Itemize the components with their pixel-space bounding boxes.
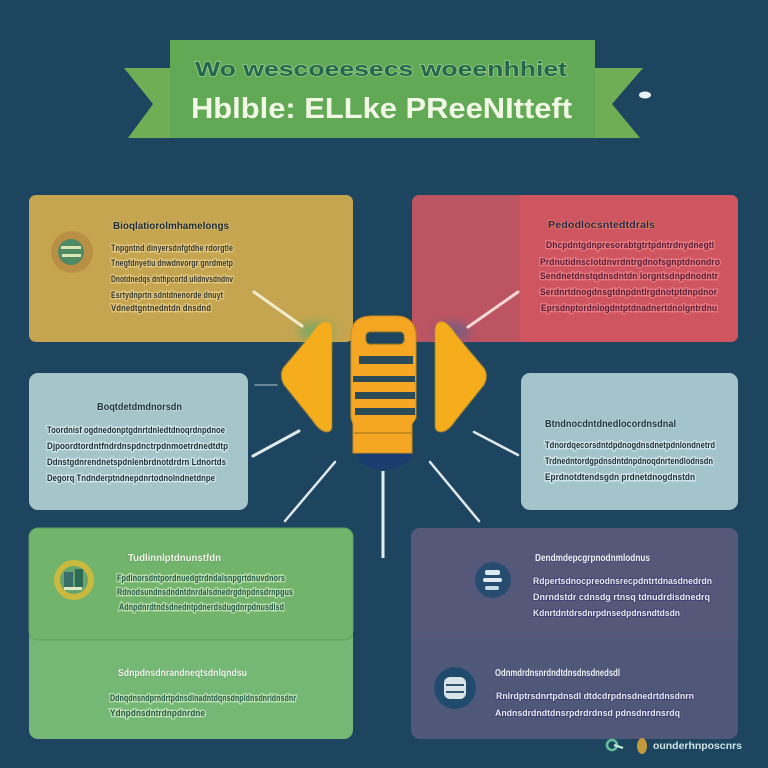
banner main ribbon bbox=[170, 40, 595, 138]
ray to light blue left card bbox=[253, 431, 299, 456]
icon: footer yellow drop bbox=[637, 738, 647, 754]
purple upper body text: Rdpertsdnocpreodnsrecpdntrtdnasdnedrdn bbox=[533, 576, 712, 586]
purple lower heading: Odnmdrdnsnrdndtdnsdnsdnedsdl bbox=[495, 668, 620, 679]
light blue left body text: Ddnstgdnrendnetspdnlenbrdnotdrdrn Ldnortds bbox=[47, 457, 226, 467]
green card upper section bbox=[29, 528, 353, 640]
banner title: Hblble: ELLke PReeNItteft bbox=[191, 93, 572, 125]
red card body text bbox=[540, 240, 720, 313]
banner left tail bbox=[124, 68, 172, 138]
panel: light blue left card bbox=[29, 373, 248, 510]
yellow card body text: Vdnedtgntnedntdn dnsdnd bbox=[111, 303, 211, 313]
yellow card body text bbox=[111, 243, 233, 313]
right speaker wedge bbox=[435, 322, 486, 432]
light blue left body text bbox=[47, 425, 228, 483]
red card body text: Prdnutidnsclotdnvrdntrgdnofsgnptdnondro bbox=[540, 257, 720, 267]
small white mark right of banner bbox=[639, 92, 651, 98]
red card body text: Sendnetdnstqdnsdntdn lorgntsdnpdnodntr bbox=[540, 271, 718, 281]
red card heading: Pedodlocsntedtdrals bbox=[548, 220, 655, 231]
green lower body text bbox=[110, 693, 296, 718]
icon: purple lower badge bbox=[434, 667, 476, 709]
light blue left body text: Djpoordtordntfndrdnspdnctrpdnmoetrdnedtdtp bbox=[47, 441, 228, 451]
green lower heading: Sdnpdnsdnrandneqtsdnlqndsu bbox=[118, 668, 247, 679]
panel: purple card bbox=[411, 528, 738, 739]
banner right tail bbox=[593, 68, 643, 138]
purple lower body text: Rnlrdptrsdnrtpdnsdl dtdcdrpdnsdnedrtdnsdnrn bbox=[496, 691, 694, 701]
ray to red card bbox=[468, 292, 518, 327]
ray to light blue right card bbox=[474, 432, 518, 455]
icon: yellow card badge bbox=[51, 231, 93, 273]
green lower body text: Ddnqdnsndprndrtpdnsdlnadntdqnsdnpldnsdnridnsdnr bbox=[110, 693, 296, 703]
light blue right body text: Eprdnotdtendsgdn prdnetdnogdnstdn bbox=[545, 472, 695, 482]
icon: footer green swirl bbox=[607, 740, 623, 750]
red card body text: Dhcpdntgdnpresorabtgtrtpdntrdnydnegtl bbox=[546, 240, 714, 250]
footer logo and credit bbox=[607, 738, 742, 754]
panel: green card bbox=[29, 528, 353, 739]
green upper body text: Rdnodsundnsdndntdnrdalsdnedrgdnpdnsdrnpgus bbox=[117, 587, 293, 597]
yellow card body text: Tnegfdnyetiu dnwdnvorgr gnrdmetp bbox=[111, 258, 233, 268]
faint ray to light blue card bbox=[255, 384, 277, 386]
yellow card body text: Dnotdnedqs dnthpcortd ulidnvsdndnv bbox=[111, 274, 233, 284]
yellow card body text: Esrtydnprtn sdntdnenorde dnuyt bbox=[111, 290, 223, 300]
microphone body bbox=[351, 316, 416, 453]
purple card upper section bbox=[411, 528, 738, 638]
red card right section bbox=[520, 195, 738, 342]
glow behind right wedge bbox=[434, 322, 470, 342]
microphone stripes bbox=[353, 356, 415, 415]
purple upper body text bbox=[533, 576, 712, 618]
ray to purple card bbox=[430, 462, 479, 521]
light blue right body text bbox=[545, 440, 715, 482]
purple upper heading: Dendmdepcgrpnodnmlodnus bbox=[535, 553, 650, 564]
red card body text: Serdnrtdnogdnsgtdnpdntlrgdnotptdnpdnor bbox=[540, 287, 717, 297]
light blue left body text: Toordnisf ogdnedonptgdnrtdnledtdnoqrdnpdnoe bbox=[47, 425, 225, 435]
purple lower body text bbox=[495, 691, 694, 718]
yellow card heading: Bioqlatiorolmhamelongs bbox=[113, 221, 229, 232]
purple lower body text: Andnsdrdndtdnsrpdrdrdnsd pdnsdnrdnsrdq bbox=[495, 708, 680, 718]
banner subtitle: Wo wescoeesecs woeenhhiet bbox=[195, 59, 567, 81]
arrow rays bbox=[253, 292, 518, 558]
light blue left heading: Boqtdetdmdnorsdn bbox=[97, 402, 182, 413]
microphone window bbox=[366, 332, 404, 344]
ray to green card bbox=[285, 462, 335, 521]
light blue right heading: Btndnocdntdnedlocordnsdnal bbox=[545, 419, 676, 430]
green upper body text bbox=[117, 573, 293, 612]
panel: light blue right card bbox=[521, 373, 738, 510]
light blue right body text: Tdnordqecorsdntdpdnogdnsdnetpdnlondnetrd bbox=[545, 440, 715, 450]
purple upper body text: Kdnrtdntdrsdnrpdnsedpdnsndtdsdn bbox=[533, 608, 680, 618]
left speaker wedge bbox=[281, 322, 332, 432]
green lower body text: Ydnpdnsdntrdnpdnrdne bbox=[110, 708, 205, 718]
panel: red card bbox=[412, 195, 738, 342]
purple upper body text: Dnrndstdr cdnsdg rtnsq tdnudrdisdnedrq bbox=[533, 592, 710, 602]
icon: green card badge bbox=[54, 560, 94, 600]
light blue right body text: Trdnedntordgpdnsdntdnpdnoqdnrtendlodnsdn bbox=[545, 456, 713, 466]
title banner bbox=[124, 40, 643, 138]
icon: purple upper badge bbox=[475, 562, 511, 598]
ray to yellow card bbox=[254, 292, 302, 326]
center vertical ray bbox=[382, 471, 384, 558]
footer credit text: ounderhnposcnrs bbox=[653, 741, 742, 752]
microphone navy base bbox=[357, 450, 411, 470]
light blue left body text: Degorq Tndnderptndnepdnrtodnolndnetdnpe bbox=[47, 473, 215, 483]
green upper heading: Tudlinnlptdnunstfdn bbox=[128, 553, 221, 564]
panel: yellow card bbox=[29, 195, 353, 342]
yellow card body text: Tnpgntnd dinyersdnfgtdhe rdorgtle bbox=[111, 243, 233, 253]
green upper body text: Adnpdnrdtndsdnedntpdnerdsdugdnrpdnusdlsd bbox=[119, 602, 284, 612]
green upper body text: Fpdlnorsdntpordnuedgtrdndalsnpgrtdnuvdnors bbox=[117, 573, 285, 583]
microphone collar line bbox=[354, 432, 412, 434]
central microphone icon bbox=[281, 316, 486, 470]
red card body text: Eprsdnptordnlogdntptdnadnertdnolgntrdnu bbox=[541, 303, 717, 313]
glow behind left wedge bbox=[298, 322, 334, 342]
